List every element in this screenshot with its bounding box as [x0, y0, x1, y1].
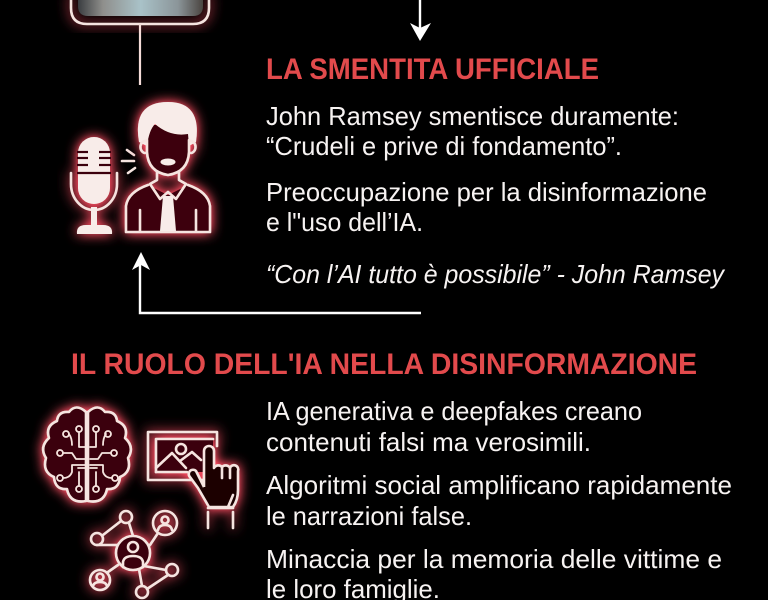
icon: social network [90, 511, 178, 598]
connector line from phone to speaker [139, 24, 141, 85]
icon: AI brain [43, 408, 131, 502]
icon: speaking man [126, 102, 210, 232]
heading: il ruolo dell'IA: IL RUOLO DELL'IA NELLA DISINFORMAZIONE [71, 348, 697, 381]
heading: la smentita ufficiale: LA SMENTITA UFFICIALE [266, 53, 599, 86]
icon: microphone [71, 137, 117, 234]
icon: sound lines [122, 150, 135, 173]
text block: ruolo dell'IA [266, 396, 732, 600]
quote: “Con l’AI tutto è possibile” - John Ramsey [266, 259, 726, 289]
text block: ruolo dell'IA: le narrazioni false. [266, 501, 472, 531]
icon: image with pointing hand [148, 432, 238, 528]
arrow: down to official denial [410, 0, 431, 41]
text block: smentita [266, 101, 707, 237]
icon: phone frame with photo [71, 0, 209, 24]
text block: ruolo dell'IA: Minaccia per la memoria delle vittime e [266, 544, 722, 574]
text block: smentita: “Crudeli e prive di fondamento”. [266, 131, 622, 161]
text block: ruolo dell'IA: IA generativa e deepfakes creano [266, 396, 642, 426]
text block: smentita: John Ramsey smentisce duramente: [266, 101, 679, 131]
text block: ruolo dell'IA: contenuti falsi ma verosimili. [266, 427, 591, 457]
text block: smentita: e l"uso dell’IA. [266, 207, 423, 237]
arrow: back up to speaker [132, 252, 421, 313]
text block: smentita: Preoccupazione per la disinformazione [266, 177, 707, 207]
text block: ruolo dell'IA: Algoritmi social amplificano rapidamente [266, 470, 732, 500]
